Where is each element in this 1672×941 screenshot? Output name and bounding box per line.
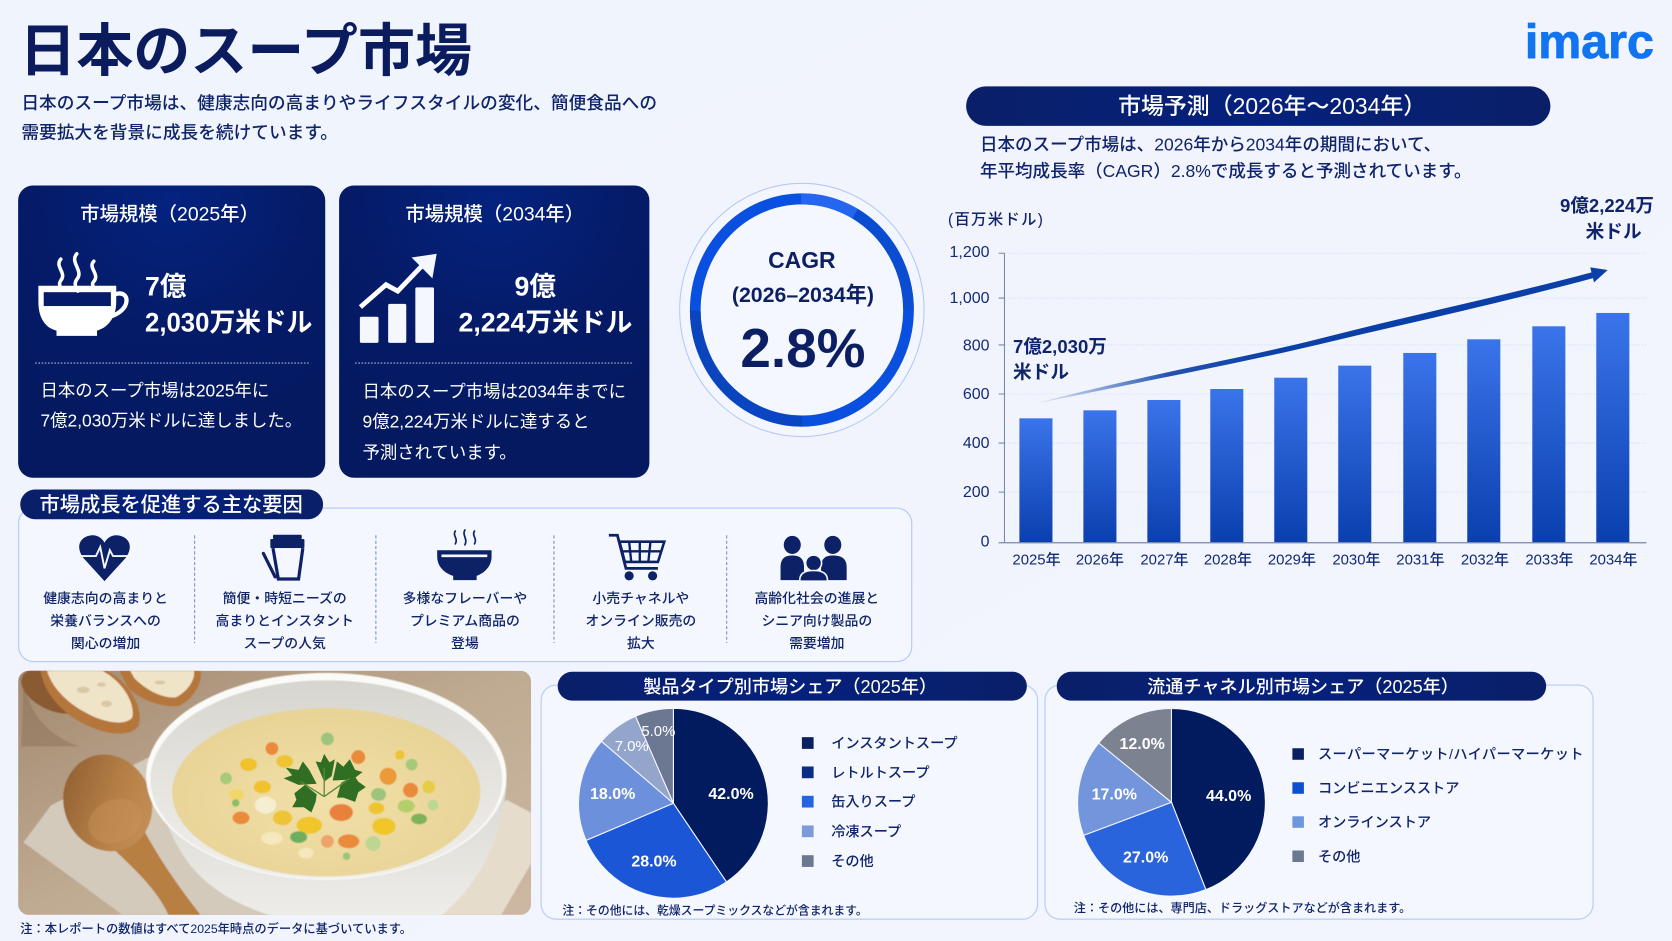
- heading: growth drivers: [20, 489, 323, 519]
- heading: distribution channel share: [1057, 672, 1546, 701]
- legend: product type: インスタントスープ: [831, 736, 958, 752]
- value: 9億2,224万米ドル: [459, 271, 632, 338]
- x axis labels: 2025年: [1012, 552, 1061, 569]
- label: start value: [1013, 336, 1107, 383]
- description 2025: 日本のスープ市場は2025年に: [41, 381, 269, 401]
- x axis labels: [1012, 552, 1637, 569]
- heading: market forecast: 市場予測（2026年〜2034年）: [1118, 93, 1426, 119]
- value: 7億2,030万米ドル: 2,030万米ドル: [145, 308, 312, 338]
- y axis: 1,200: [950, 244, 990, 261]
- description 2025: [41, 381, 302, 431]
- label: end value: [1560, 195, 1654, 242]
- value: 9億2,224万米ドル: 2,224万米ドル: [459, 308, 632, 338]
- footnote: 注：本レポートの数値はすべて2025年時点のデータに基づいています。: [20, 921, 412, 936]
- value: 9億2,224万米ドル: 9億: [515, 271, 556, 301]
- heading: distribution channel share: 流通チャネル別市場シェア（2025年）: [1147, 677, 1459, 697]
- driver text 1: 関心の増加: [71, 635, 140, 651]
- panel: distribution channel share: [1045, 672, 1593, 919]
- pie chart: distribution channel: 27.0%: [1123, 850, 1168, 867]
- description 2025: 7億2,030万米ドルに達しました。: [41, 411, 302, 431]
- x axis labels: 2030年: [1332, 552, 1380, 569]
- legend: distribution channel: その他: [1318, 849, 1360, 865]
- logo: imarc: imarc: [1525, 16, 1654, 69]
- icon: family group: [781, 536, 847, 581]
- pie chart: product type: 7.0%: [615, 738, 649, 755]
- y axis: 200: [963, 484, 990, 501]
- legend: product type: 缶入りスープ: [831, 794, 915, 811]
- panel: market size 2025: [18, 186, 325, 478]
- driver text 2: 簡便・時短ニーズの: [223, 590, 347, 606]
- pie chart: distribution channel: 12.0%: [1119, 736, 1165, 753]
- driver text 3: 多様なフレーバーや: [403, 590, 527, 606]
- growth arrow: [1039, 267, 1608, 403]
- legend: product type: その他: [831, 854, 874, 870]
- note: product type: 注：その他には、乾燥スープミックスなどが含まれます。: [562, 903, 868, 917]
- icon: steaming soup cup: [38, 254, 127, 336]
- x axis labels: 2029年: [1268, 552, 1316, 569]
- pie chart: distribution channel: [1078, 708, 1265, 896]
- panel: market size 2034: [339, 186, 649, 478]
- driver text 3: [403, 590, 527, 651]
- driver text 5: シニア向け製品の: [761, 612, 872, 628]
- label: start value: 米ドル: [1013, 362, 1069, 383]
- icon: shopping cart: [609, 535, 664, 580]
- legend: distribution channel: オンラインストア: [1318, 815, 1431, 831]
- description 2034: 予測されています。: [363, 443, 517, 463]
- pie chart: distribution channel: 17.0%: [1092, 787, 1137, 804]
- driver text 2: スープの人気: [244, 635, 326, 651]
- value: 7億2,030万米ドル: 7億: [145, 271, 187, 301]
- driver text 4: 小売チャネルや: [592, 590, 689, 606]
- icon: rising bar chart: [360, 254, 437, 343]
- driver text 3: プレミアム商品の: [410, 612, 520, 628]
- pie chart: product type: 28.0%: [631, 853, 677, 870]
- value: 7億2,030万米ドル: [145, 271, 312, 338]
- driver text 2: 高まりとインスタント: [216, 612, 354, 628]
- heading: market size 2025: 市場規模（2025年）: [80, 204, 259, 226]
- panel: growth drivers: [19, 489, 912, 662]
- heading: product type share: 製品タイプ別市場シェア（2025年）: [643, 677, 937, 697]
- y axis: 600: [963, 386, 990, 403]
- driver text 2: [216, 590, 354, 651]
- x axis labels: 2034年: [1589, 552, 1637, 569]
- label: start value: 7億2,030万: [1013, 336, 1107, 357]
- y axis: [950, 244, 1004, 550]
- driver text 4: オンライン販売の: [585, 612, 696, 628]
- x axis labels: 2028年: [1204, 552, 1252, 569]
- driver text 3: 登場: [451, 635, 479, 651]
- forecast description: [980, 134, 1472, 181]
- driver text 5: 需要増加: [789, 635, 845, 651]
- bar chart: market forecast: [948, 195, 1654, 569]
- intro text: 日本のスープ市場は、健康志向の高まりやライフスタイルの変化、簡便食品への: [21, 93, 657, 113]
- title: 日本のスープ市場: [19, 19, 472, 83]
- y axis: 400: [963, 435, 990, 452]
- pie chart: distribution channel: 44.0%: [1206, 788, 1251, 805]
- y axis: 1,000: [950, 290, 990, 307]
- chart unit: (百万米ドル): [948, 210, 1043, 228]
- icon: instant soup cup: [263, 535, 304, 579]
- x axis labels: 2027年: [1140, 552, 1189, 569]
- forecast description: 日本のスープ市場は、2026年から2034年の期間において、: [980, 134, 1441, 154]
- driver text 5: [754, 590, 879, 651]
- driver text 5: 高齢化社会の進展と: [754, 590, 879, 606]
- note: distribution channel: 注：その他には、専門店、ドラッグストアなどが含まれます。: [1074, 900, 1411, 915]
- heading: market forecast: [966, 86, 1550, 126]
- legend: distribution channel: スーパーマーケット/ハイパーマーケット: [1318, 747, 1583, 763]
- driver text 4: 拡大: [627, 635, 655, 651]
- heading: product type share: [558, 672, 1027, 701]
- x axis labels: 2032年: [1461, 552, 1509, 569]
- legend: product type: レトルトスープ: [831, 765, 930, 781]
- legend: distribution channel: コンビニエンスストア: [1318, 781, 1459, 797]
- legend: product type: 冷凍スープ: [831, 824, 901, 840]
- icon: steaming bowl: [437, 530, 492, 580]
- CAGR period: (2026–2034年): [732, 283, 874, 307]
- description 2034: 9億2,224万米ドルに達すると: [363, 412, 589, 432]
- pie chart: product type: 42.0%: [708, 786, 754, 803]
- panel: product type share: [541, 672, 1038, 919]
- photo: bowl of vegetable soup: [14, 659, 531, 928]
- intro text: [21, 93, 657, 143]
- pie chart: product type: 5.0%: [641, 723, 675, 740]
- x axis labels: 2031年: [1396, 552, 1444, 569]
- legend: distribution channel: [1292, 747, 1583, 865]
- description 2034: 日本のスープ市場は2034年までに: [363, 382, 626, 402]
- icon: heart with pulse: [79, 535, 130, 581]
- label: end value: 9億2,224万: [1560, 195, 1654, 216]
- pie chart: product type: [578, 708, 768, 898]
- driver text 1: 栄養バランスへの: [50, 612, 161, 628]
- CAGR ring callout: [680, 183, 924, 437]
- driver text 1: [43, 590, 168, 651]
- heading: market size 2034: 市場規模（2034年）: [405, 204, 584, 226]
- y axis: 800: [963, 337, 990, 354]
- x axis labels: 2033年: [1525, 552, 1573, 569]
- driver text 4: [585, 590, 696, 651]
- legend: product type: [802, 736, 958, 870]
- label: end value: 米ドル: [1586, 221, 1642, 242]
- driver text 1: 健康志向の高まりと: [43, 590, 168, 606]
- x axis labels: 2026年: [1076, 552, 1124, 569]
- CAGR value: 2.8%: [740, 317, 866, 379]
- forecast description: 年平均成長率（CAGR）2.8%で成長すると予測されています。: [980, 161, 1472, 181]
- bars: [1019, 313, 1629, 542]
- pie chart: product type: 18.0%: [590, 786, 635, 803]
- intro text: 需要拡大を背景に成長を続けています。: [21, 123, 338, 143]
- y axis: 0: [981, 533, 990, 550]
- heading: growth drivers: 市場成長を促進する主な要因: [39, 493, 303, 516]
- description 2034: [363, 382, 626, 463]
- CAGR label: CAGR: [768, 247, 836, 273]
